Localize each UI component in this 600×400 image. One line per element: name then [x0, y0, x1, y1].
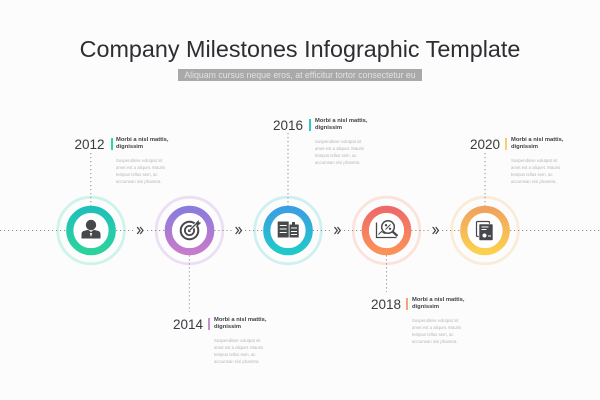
milestone 2018: accumsan nisi pharetra.	[412, 339, 458, 344]
milestone 2020: tempus tellus sem, ac	[511, 172, 553, 177]
milestone 2016: amet est a aliquet. Mauris	[315, 146, 364, 151]
milestone 2018: Suspendisse volutpat sit	[412, 318, 458, 323]
arrow	[236, 227, 242, 234]
milestone 2014: amet est a aliquet. Mauris	[214, 345, 263, 350]
subtitle banner: Aliquam cursus neque eros, at efficitur tortor consectetur eu	[184, 70, 416, 80]
milestone 2012	[74, 137, 169, 184]
milestone 2020: amet est a aliquet. Mauris	[511, 165, 560, 170]
milestone 2014: dignissim	[214, 324, 241, 330]
milestone 2012: accumsan nisi pharetra.	[116, 179, 162, 184]
milestone 2012: Suspendisse volutpat sit	[116, 158, 162, 163]
milestone 2014: Suspendisse volutpat sit	[214, 338, 260, 343]
circle: 2016 book icon	[255, 197, 321, 264]
milestone 2012: dignissim	[116, 144, 143, 150]
milestone 2016: Suspendisse volutpat sit	[315, 139, 361, 144]
milestone 2012: amet est a aliquet. Mauris	[116, 165, 165, 170]
milestone 2020: dignissim	[511, 144, 538, 150]
circle: 2014 target icon	[156, 197, 223, 264]
milestone 2020: Suspendisse volutpat sit	[511, 158, 557, 163]
title: Company Milestones Infographic Template	[80, 36, 520, 62]
milestone 2020: accumsan nisi pharetra.	[511, 179, 557, 184]
milestone 2018: dignissim	[412, 304, 439, 310]
circle: 2012 person icon	[58, 197, 124, 264]
milestone 2018: tempus tellus sem, ac	[412, 332, 454, 337]
milestone 2014: Morbi a nisl mattis,	[214, 317, 267, 323]
milestone 2016	[273, 118, 368, 165]
milestone 2014: tempus tellus sem, ac	[214, 352, 256, 357]
milestone 2020	[470, 137, 564, 184]
milestone 2016: 2016	[273, 118, 303, 133]
milestone 2020: Morbi a nisl mattis,	[511, 137, 564, 143]
milestone 2018: Morbi a nisl mattis,	[412, 297, 465, 303]
milestone 2012: 2012	[74, 137, 105, 152]
milestone 2020: 2020	[470, 137, 500, 152]
milestone 2016: Morbi a nisl mattis,	[315, 118, 368, 124]
milestone 2014: accumsan nisi pharetra.	[214, 359, 260, 364]
milestone 2018	[371, 297, 465, 344]
milestone 2014: 2014	[173, 317, 203, 332]
milestone 2018: 2018	[371, 297, 401, 312]
milestone 2016: tempus tellus sem, ac	[315, 153, 357, 158]
milestone 2018: amet est a aliquet. Mauris	[412, 325, 461, 330]
milestone 2012: Morbi a nisl mattis,	[116, 137, 169, 143]
milestone 2014	[173, 317, 267, 364]
arrow	[433, 227, 438, 234]
milestone 2016: accumsan nisi pharetra.	[315, 160, 361, 165]
circle: 2020 document icon	[452, 197, 518, 264]
milestone 2016: dignissim	[315, 125, 342, 131]
arrow	[334, 227, 340, 234]
circle: 2018 analytics icon	[353, 197, 420, 264]
arrow	[137, 227, 143, 234]
milestone 2012: tempus tellus sem, ac	[116, 172, 158, 177]
